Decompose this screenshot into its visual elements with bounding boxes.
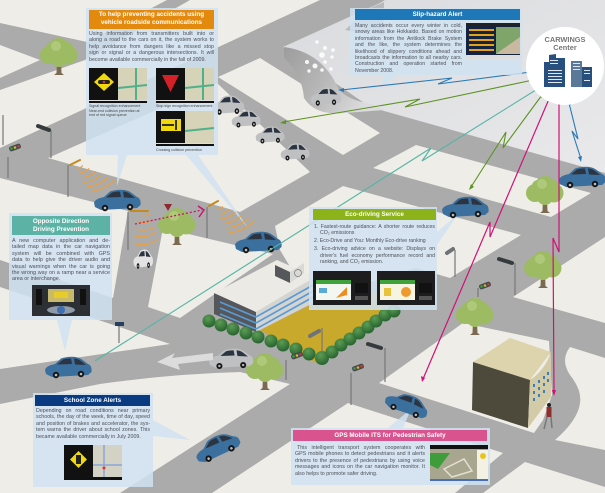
text: slip hazard description: Many accidents occur every winter in cold, — [355, 23, 462, 29]
text: roadside communications description: along a road to the cars on it, the system works to — [89, 37, 214, 43]
text: school zone description: and position of brakes and accelerator, the sys- — [36, 421, 150, 427]
text: roadside communications description — [89, 31, 214, 63]
text: pedestrian safety description: drivers to the presence of pedestrians by using voice — [295, 458, 425, 464]
text: slip hazard description: information from the Antilock Brake System — [355, 36, 462, 42]
caption: crossing collision: Crossing collision prevention — [156, 148, 202, 152]
panel: roadside communications — [86, 8, 218, 155]
panel: GPS mobile ITS for pedestrian safety — [291, 428, 490, 485]
heading: pedestrian safety: GPS Mobile ITS for Pedestrian Safety — [334, 432, 446, 439]
text: slip hazard description: snowy areas like Hokkaido. Based on motion — [355, 29, 462, 35]
heading: pedestrian safety — [293, 430, 487, 441]
center office buildings icon — [544, 54, 592, 87]
panel: eco-driving service — [309, 207, 437, 310]
text: opposite direction description: visual warnings when the car is going — [12, 264, 110, 270]
dotted roadside warning arrow — [135, 206, 204, 224]
screen: school zone warning — [64, 445, 122, 480]
text: roadside communications description: become available commercially in the fall of 2009. — [89, 57, 206, 63]
text: roadside communications description: help avoidance from dangers like a missed stop — [89, 44, 214, 50]
screen: eco ranking — [377, 271, 435, 305]
CARWINGS Center label: Center — [553, 43, 577, 52]
text: opposite direction description: tailed map data in the car navigation — [12, 244, 110, 250]
orange roadside signal waves — [78, 166, 254, 245]
heading: eco-driving service: Eco-driving Service — [345, 211, 404, 218]
list: eco-driving services: 3. Eco-driving advice on a website: Displays on — [314, 246, 435, 252]
text: pedestrian safety description — [295, 445, 425, 477]
CARWINGS center circle — [526, 27, 604, 105]
text: school zone description: tem warns the driver about school zones. This — [36, 427, 150, 433]
trees — [40, 38, 564, 390]
heading: roadside communications: vehicle roadside communications — [101, 19, 202, 26]
heading: eco-driving service — [313, 209, 436, 220]
text: slip hazard description: November 2008. — [355, 68, 393, 74]
screen: pedestrian map — [430, 445, 488, 481]
caption: signal recognition — [89, 104, 140, 117]
panel pointer tails — [57, 74, 458, 440]
text: slip hazard description: Construction and operation started from — [355, 61, 462, 67]
screen: dashboard warning — [32, 285, 90, 316]
screen: slip hazard navigation — [466, 23, 520, 59]
text: pedestrian safety description: This intelligent transport system cooperates with — [297, 445, 425, 451]
text: school zone description — [36, 408, 150, 440]
hedge row — [202, 304, 400, 365]
heading: slip hazard alert — [355, 9, 520, 20]
heading: roadside communications — [89, 10, 214, 28]
heading: opposite direction — [12, 216, 110, 235]
heading: slip hazard alert: Slip-hazard Alert — [413, 11, 462, 18]
heading: roadside communications: To help preventing accidents using — [99, 11, 204, 18]
text: opposite direction description — [12, 238, 110, 282]
wrong way direction arrow on road — [157, 353, 213, 370]
screen: eco route — [313, 271, 371, 305]
text: pedestrian safety description: also helps to promote safer driving. — [295, 471, 377, 477]
text: pedestrian safety description: GPS mobile phones to detect pedestrians and it alerts — [295, 451, 425, 457]
text: roadside communications description: Using information from transmitters built into or — [89, 31, 214, 37]
heading: opposite direction: Opposite Direction — [33, 218, 89, 225]
pedestrian — [544, 403, 552, 429]
list: eco-driving services: 1. Fastest-route guidance: A shorter route reduces — [314, 224, 435, 230]
text: opposite direction description: area or interchange. — [12, 276, 60, 282]
caption: signal recognition: Signal recognition enhancement — [89, 104, 140, 108]
caption: signal recognition: end of red signal queue — [89, 113, 127, 117]
text: school zone description: Depending on road conditions near primary — [36, 408, 150, 414]
heading: school zone alerts — [35, 395, 150, 406]
cars — [45, 87, 605, 466]
text: slip hazard description: and the like, the system determines the — [355, 42, 462, 48]
text: slip hazard description — [355, 23, 462, 74]
screen: crossing collision — [156, 111, 214, 146]
building with parking lot — [214, 260, 415, 363]
CARWINGS Center label — [544, 35, 586, 52]
text: roadside communications description: sign or signal or a dangerous intersections. It will — [89, 50, 214, 56]
top right sky area — [283, 0, 605, 173]
communication arrows — [95, 70, 582, 396]
text: slip hazard description: broadcasts the information to all nearby cars. — [355, 55, 462, 61]
screen: signal recognition — [89, 68, 147, 103]
panel: school zone alerts — [33, 393, 153, 487]
CARWINGS Center label: CARWINGS — [545, 35, 585, 44]
beige corner building — [472, 338, 551, 428]
text: opposite direction description: data to help give the driver audio and — [12, 257, 110, 263]
caption: stop sign recognition: Stop sign recognition enhancement — [156, 104, 212, 108]
caption: signal recognition: Near-end collision prevention at — [89, 109, 140, 113]
heading: school zone alerts: School Zone Alerts — [64, 397, 121, 404]
list: eco-driving services: CO₂ emissions — [320, 230, 354, 236]
panel: opposite direction driving prevention — [9, 213, 112, 320]
list: eco-driving services: ranking, and CO₂ emission. — [320, 259, 383, 265]
road side poles and signals — [3, 115, 515, 405]
panel: slip hazard alert — [350, 8, 522, 75]
list: eco-driving services — [314, 224, 435, 265]
heading: opposite direction: Driving Prevention — [33, 226, 89, 232]
text: opposite direction description: the wrong way on a ramp near a service — [12, 270, 110, 276]
screen: stop sign recognition — [156, 68, 214, 103]
text: school zone description: became available commercially in July 2009. — [36, 434, 141, 440]
text: slip hazard description: likelihood of slippery conditions ahead and — [355, 49, 462, 55]
text: pedestrian safety description: messages and icons on the car navigation monitor. It — [295, 464, 425, 470]
icy curve road and snowy hill — [284, 2, 384, 113]
text: opposite direction description: system will be combined with GPS — [12, 251, 110, 257]
text: opposite direction description: A new computer application and de- — [12, 238, 110, 244]
list: eco-driving services: 2. Eco-Drive and You: Monthly Eco-drive ranking — [314, 238, 426, 244]
text: school zone description: schools, the day of the week, time of day, speed — [36, 414, 150, 420]
list: eco-driving services: driver's fuel economy performance record and — [320, 253, 435, 259]
